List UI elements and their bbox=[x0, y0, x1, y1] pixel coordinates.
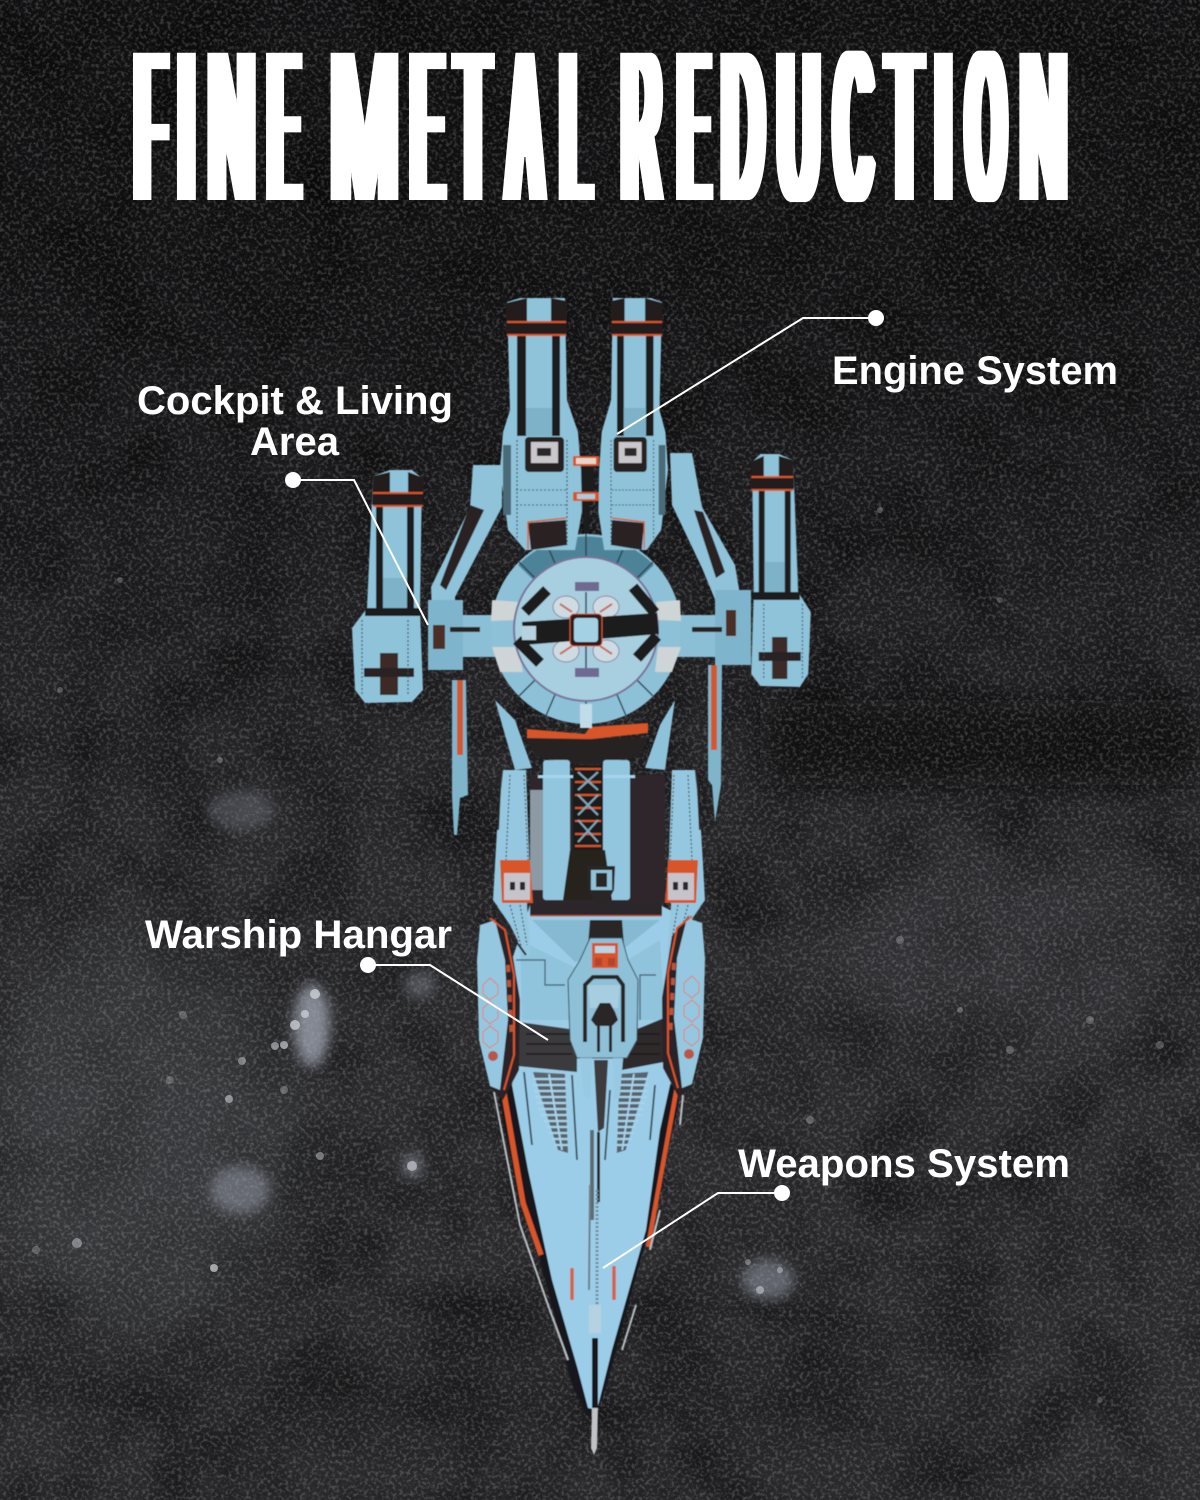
title: U bbox=[779, 7, 818, 246]
leader line: weapons system bbox=[603, 1185, 790, 1268]
leader line: engine system bbox=[617, 310, 884, 434]
label: cockpit and living area bbox=[137, 379, 453, 464]
leader line: warship hangar bbox=[360, 957, 548, 1040]
label: warship hangar: Warship Hangar bbox=[145, 913, 452, 957]
title: O bbox=[968, 7, 1004, 246]
title: M bbox=[331, 7, 398, 246]
icon: engine system - main engines bbox=[500, 298, 668, 550]
title: E bbox=[412, 7, 442, 246]
title: A bbox=[509, 7, 541, 246]
title: E bbox=[270, 7, 298, 246]
leader line: cockpit and living area bbox=[285, 472, 428, 625]
title: F bbox=[136, 7, 165, 246]
icon: reactor disc - cockpit and living area bbox=[491, 534, 681, 728]
title: T bbox=[888, 7, 921, 246]
lower neck bbox=[495, 700, 675, 903]
label: cockpit and living area: Area bbox=[250, 420, 340, 464]
icon: central turret bbox=[568, 866, 638, 1100]
title: C bbox=[836, 7, 871, 246]
label: weapons system: Weapons System bbox=[738, 1142, 1070, 1186]
title: E bbox=[680, 7, 708, 246]
title: I bbox=[179, 7, 194, 246]
title: N bbox=[209, 7, 254, 246]
title: R bbox=[623, 7, 660, 246]
label: cockpit and living area: Cockpit & Living bbox=[137, 379, 453, 423]
icon: warship hangar - hull side strips and pods bbox=[477, 768, 705, 1100]
icon: side engines bbox=[352, 454, 811, 703]
spaceship model bbox=[352, 298, 811, 1455]
text: N bbox=[1021, 7, 1066, 246]
title: D bbox=[723, 7, 762, 246]
title: I bbox=[936, 7, 951, 246]
title: L bbox=[562, 7, 588, 246]
engine arms bbox=[428, 453, 751, 670]
side pylons bbox=[452, 665, 722, 835]
label: engine system: Engine System bbox=[832, 349, 1118, 393]
icon: weapons system - main hull and nose bbox=[494, 900, 683, 1455]
title: T bbox=[457, 7, 489, 246]
title bbox=[136, 7, 1066, 246]
